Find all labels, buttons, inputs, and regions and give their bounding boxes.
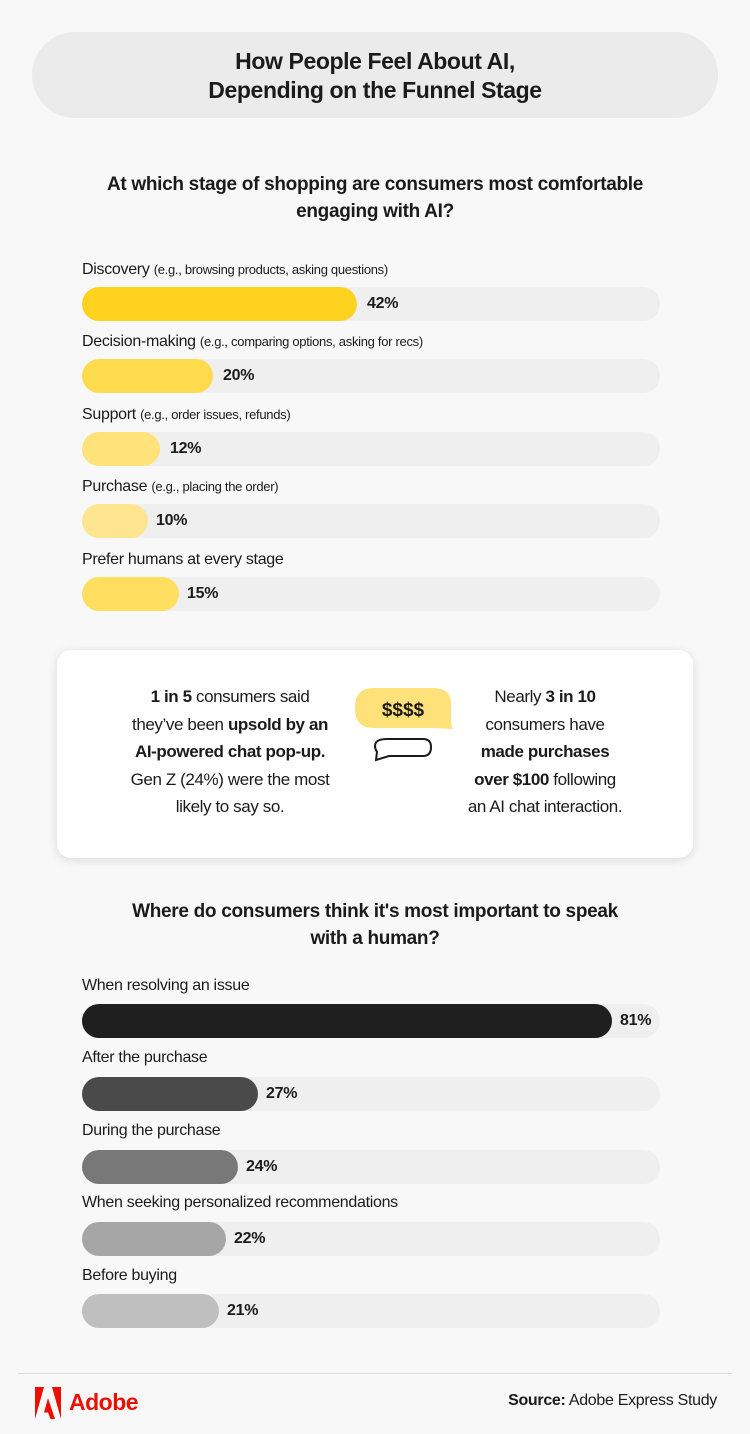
question 1 heading: [107, 174, 643, 222]
bar discovery 42%: 42%: [367, 295, 398, 312]
label resolving: When resolving an issue: [82, 977, 249, 994]
bar after 27%: [82, 1077, 660, 1111]
label support: Support (e.g., order issues, refunds): [82, 406, 290, 423]
bar before 21%: [82, 1294, 660, 1328]
bar during 24%: [82, 1150, 660, 1184]
label after: After the purchase: [82, 1049, 207, 1066]
question 2 heading: Where do consumers think it's most important to speak: [132, 901, 618, 922]
adobe logo: Adobe: [69, 1389, 138, 1415]
bar decision 20%: 20%: [223, 367, 254, 384]
stat: upsold: [131, 687, 330, 816]
stat: purchases over $100: consumers have: [485, 714, 605, 734]
stat: upsold: likely to say so.: [176, 797, 284, 816]
label purchase: Purchase (e.g., placing the order): [82, 478, 278, 495]
icon: chat bubbles: [355, 688, 453, 762]
stat: purchases over $100: over $100 following: [474, 770, 616, 788]
stat: upsold: Gen Z (24%) were the most: [131, 770, 329, 788]
bar support 12%: 12%: [170, 440, 201, 457]
source: Source: Adobe Express Study: [508, 1392, 717, 1409]
stat: purchases over $100: an AI chat interaction.: [468, 797, 622, 816]
label personalized: When seeking personalized recommendations: [82, 1194, 398, 1211]
bar after 27%: 27%: [266, 1085, 297, 1102]
stat: upsold: they’ve been upsold by an: [132, 714, 328, 734]
bar personalized 22%: [82, 1222, 660, 1256]
stat: purchases over $100: [468, 687, 622, 816]
label discovery: Discovery (e.g., browsing products, asking questions): [82, 261, 388, 278]
stat: purchases over $100: made purchases: [481, 742, 609, 761]
question 2 heading: [132, 901, 618, 949]
chart: AI comfort by stage: [82, 261, 660, 611]
stat: upsold: AI-powered chat pop-up.: [135, 742, 325, 761]
stats card: [57, 650, 693, 858]
label during: During the purchase: [82, 1122, 220, 1139]
label decision: Decision-making (e.g., comparing options, asking for recs): [82, 333, 423, 350]
stat: purchases over $100: Nearly 3 in 10: [494, 687, 596, 706]
bar decision 20%: [82, 359, 660, 393]
bar support 12%: [82, 432, 660, 466]
question 2 heading: with a human?: [310, 928, 440, 949]
stat: upsold: 1 in 5 consumers said: [151, 687, 309, 706]
label before: Before buying: [82, 1267, 177, 1284]
title pill: Depending on the Funnel Stage: [208, 77, 542, 103]
icon: chat bubbles: $$$$: [382, 700, 425, 721]
bar resolving 81%: [82, 1004, 660, 1038]
title pill: How People Feel About AI,: [235, 48, 515, 74]
question 1 heading: At which stage of shopping are consumers most comfortable: [107, 174, 643, 195]
bar personalized 22%: 22%: [234, 1230, 265, 1247]
title pill: [32, 32, 718, 118]
label prefer humans: Prefer humans at every stage: [82, 551, 283, 568]
question 1 heading: engaging with AI?: [296, 201, 454, 222]
bar before 21%: 21%: [227, 1302, 258, 1319]
bar during 24%: 24%: [246, 1158, 277, 1175]
bar prefer humans 15%: 15%: [187, 585, 218, 602]
bar purchase 10%: [82, 504, 660, 538]
bar resolving 81%: 81%: [620, 1012, 651, 1029]
bar prefer humans 15%: [82, 577, 660, 611]
chart: speak with human: [82, 977, 660, 1328]
bar purchase 10%: 10%: [156, 512, 187, 529]
adobe logo: [35, 1387, 138, 1419]
bar discovery 42%: [82, 287, 660, 321]
